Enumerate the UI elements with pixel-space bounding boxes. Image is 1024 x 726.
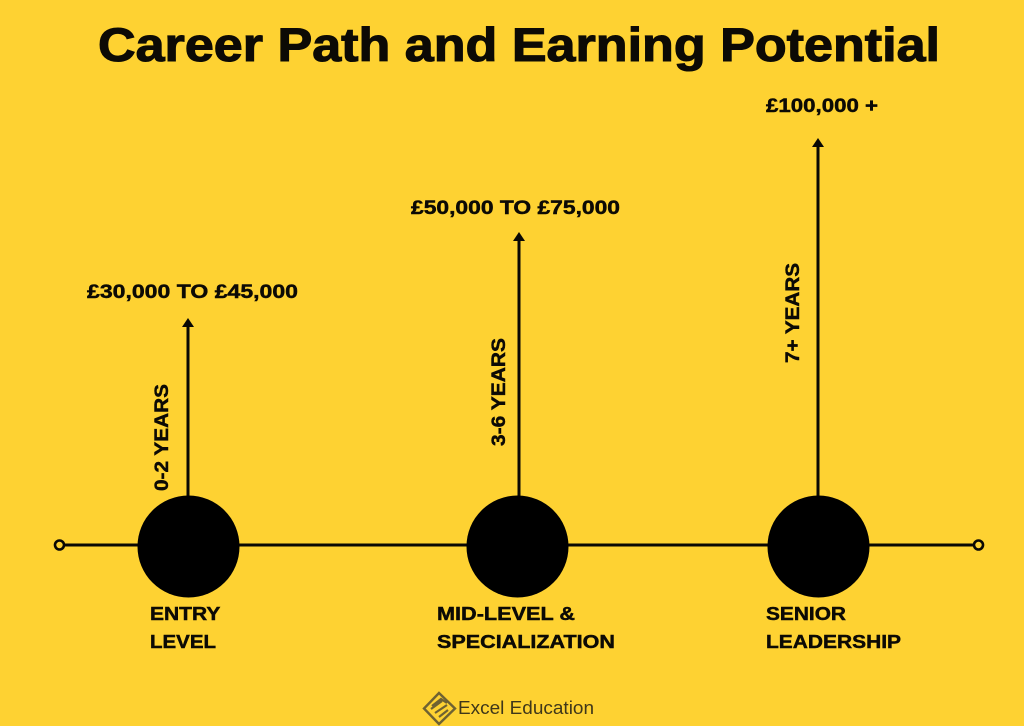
duration: senior: 7+ YEARS	[783, 263, 804, 363]
arrow: mid-level growth	[513, 232, 525, 500]
timeline axis	[55, 540, 983, 550]
label: entry level: ENTRY	[150, 603, 221, 624]
icon: diamond logo	[424, 693, 455, 724]
stage: mid-level and specialization	[411, 198, 620, 652]
label: mid-level: SPECIALIZATION	[437, 631, 615, 652]
stage: entry level	[87, 282, 298, 652]
arrow: entry level growth	[182, 318, 194, 500]
title: Career Path and Earning Potential	[98, 18, 940, 71]
duration: mid-level: 3-6 YEARS	[489, 338, 510, 446]
milestone circle: mid-level	[466, 496, 568, 598]
label: senior: SENIOR	[766, 603, 846, 624]
arrow: senior growth	[812, 138, 824, 500]
milestone circle: senior	[768, 496, 870, 598]
salary: mid-level: £50,000 TO £75,000	[411, 198, 620, 219]
label: entry level: LEVEL	[150, 631, 216, 652]
salary: senior: £100,000 +	[766, 96, 878, 117]
label: mid-level: MID-LEVEL &	[437, 603, 575, 624]
duration: entry level: 0-2 YEARS	[152, 384, 173, 491]
stage: senior leadership	[766, 96, 901, 652]
label: senior: LEADERSHIP	[766, 631, 901, 652]
milestone circle: entry level	[138, 496, 240, 598]
salary: entry level: £30,000 TO £45,000	[87, 282, 298, 303]
brand name: Excel Education	[458, 698, 594, 718]
brand logo	[424, 693, 594, 724]
